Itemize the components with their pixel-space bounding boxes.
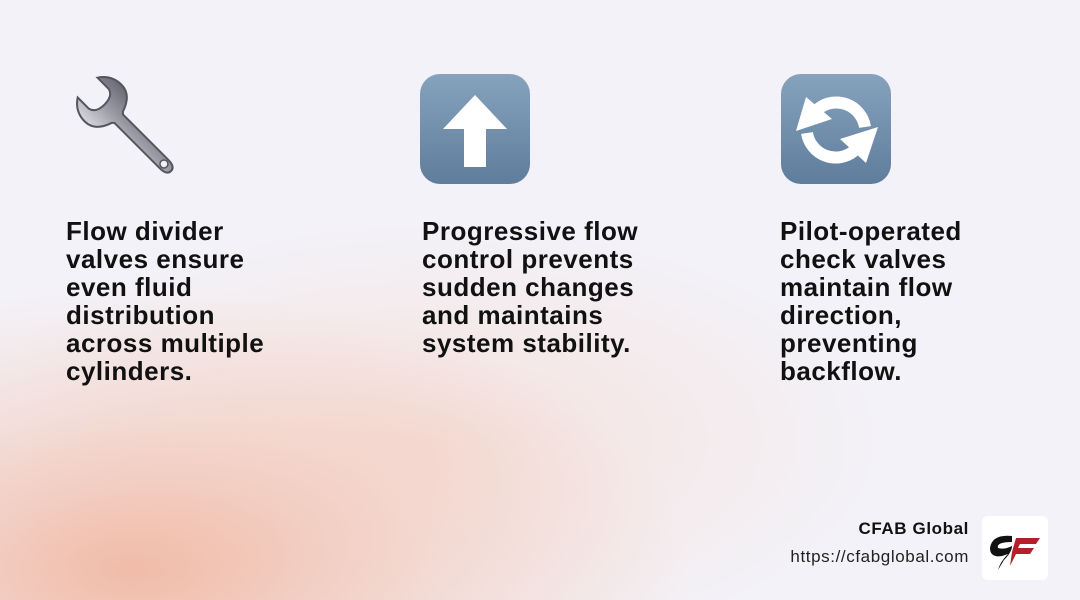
icon: wrench xyxy=(76,76,174,174)
text: pilot-operated: Pilot-operated xyxy=(780,216,962,246)
text: flow divider xyxy=(66,216,264,386)
text: pilot-operated: check valves xyxy=(780,244,946,274)
text: progressive flow: system stability. xyxy=(422,328,631,358)
text: flow divider: Flow divider xyxy=(66,216,224,246)
text: pilot-operated: backflow. xyxy=(780,356,902,386)
text: pilot-operated: preventing xyxy=(780,328,918,358)
text: flow divider: distribution xyxy=(66,300,215,330)
url: https://cfabglobal.com xyxy=(790,547,969,566)
text: flow divider: cylinders. xyxy=(66,356,192,386)
text: progressive flow xyxy=(422,216,638,358)
logo xyxy=(982,516,1048,580)
text: progressive flow: control prevents xyxy=(422,244,634,274)
icon: refresh xyxy=(781,74,891,184)
text: flow divider: across multiple xyxy=(66,328,264,358)
text: flow divider: valves ensure xyxy=(66,244,245,274)
text: pilot-operated: maintain flow xyxy=(780,272,953,302)
text: progressive flow: and maintains xyxy=(422,300,603,330)
text: progressive flow: Progressive flow xyxy=(422,216,638,246)
text: progressive flow: sudden changes xyxy=(422,272,634,302)
footer brand xyxy=(790,519,969,566)
icon: up arrow xyxy=(420,74,530,184)
text: pilot-operated xyxy=(780,216,962,386)
text: pilot-operated: direction, xyxy=(780,300,902,330)
brand name: CFAB Global xyxy=(858,519,969,538)
text: flow divider: even fluid xyxy=(66,272,192,302)
